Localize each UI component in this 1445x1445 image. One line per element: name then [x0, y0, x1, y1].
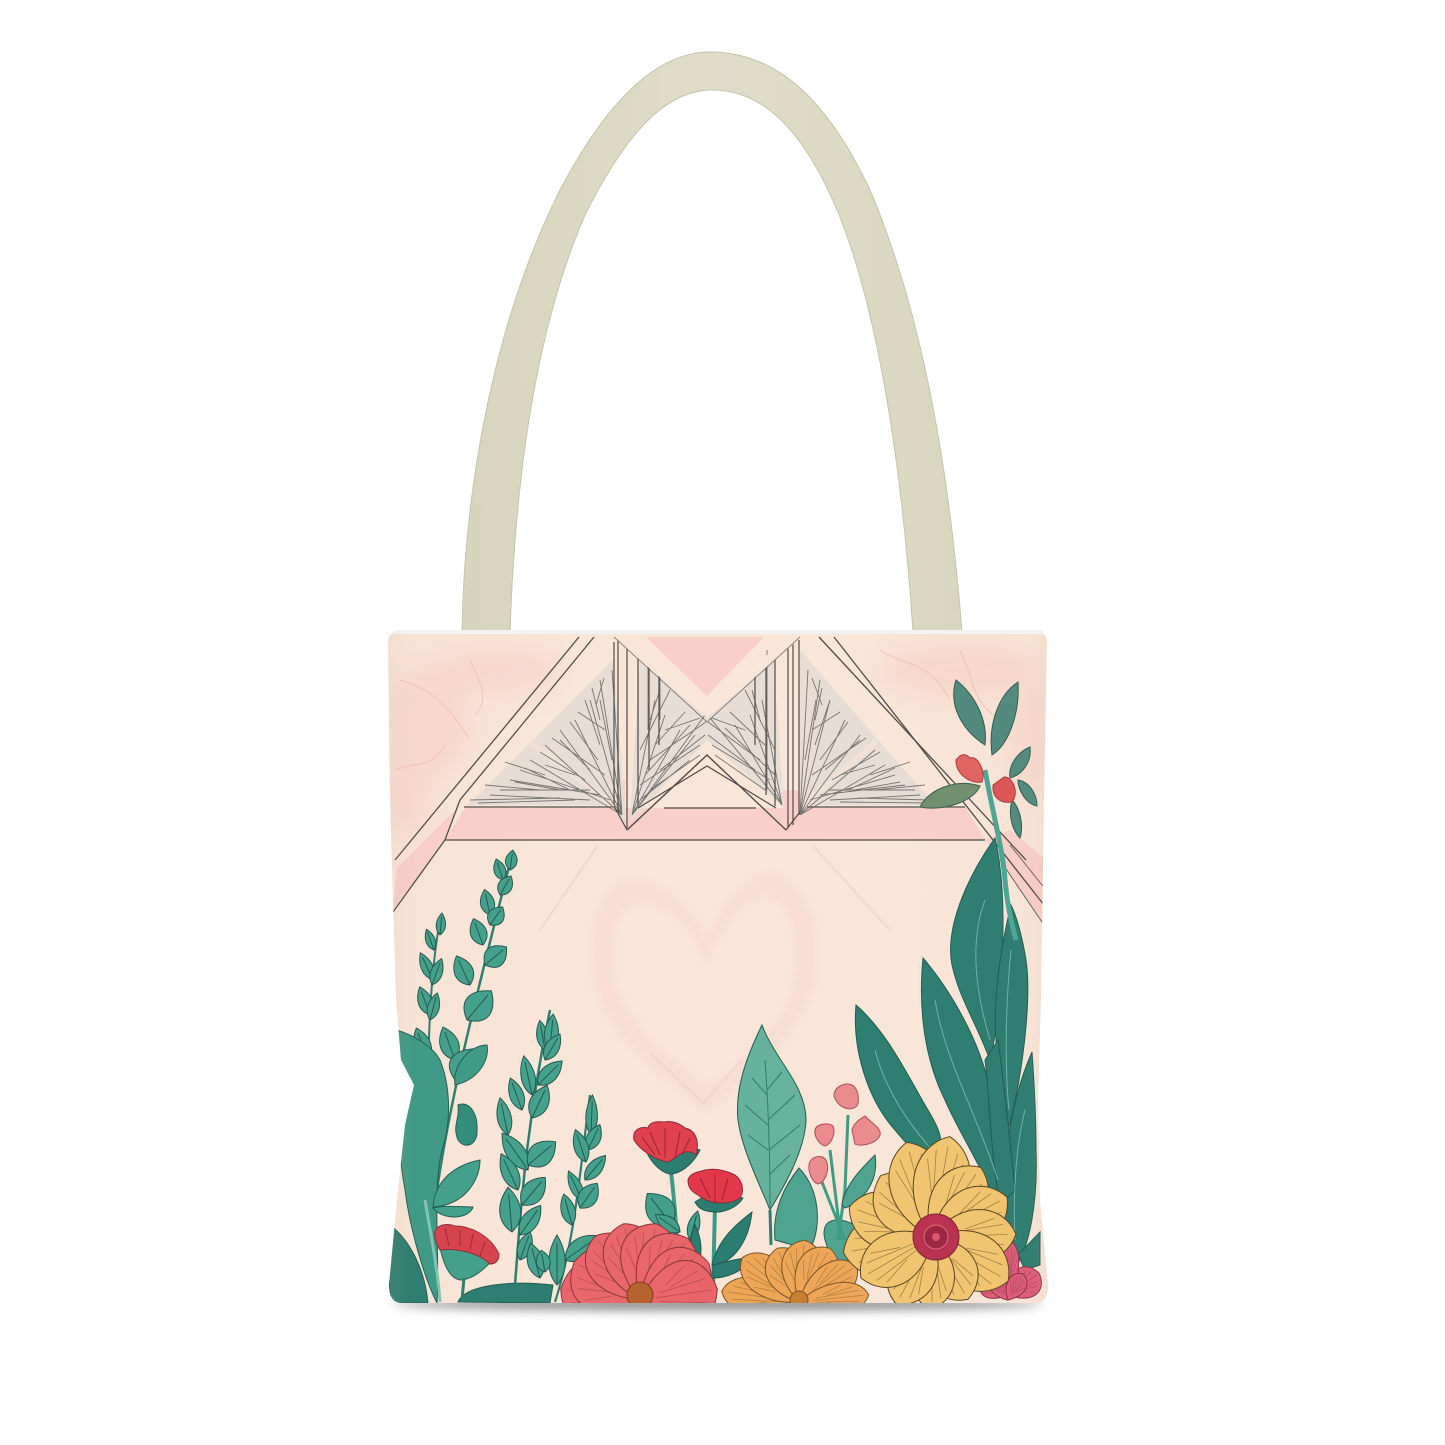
faint lower triangle lines	[540, 845, 890, 1103]
leaf: corner small	[1018, 1232, 1040, 1270]
fabric edge shading	[380, 630, 1060, 1310]
bag body	[380, 630, 1060, 1334]
red carnation centre	[633, 1121, 701, 1240]
plant: left sprig tall	[434, 849, 519, 1190]
bag handle	[462, 52, 962, 632]
leaf: tall centre blade	[951, 838, 1003, 1060]
watercolor heart	[598, 879, 812, 1102]
marble wash	[390, 640, 1052, 840]
plant: left sprig short	[414, 912, 446, 1049]
leaf: left blade	[855, 1005, 941, 1161]
red buds	[956, 755, 983, 782]
orange flower	[719, 1238, 870, 1320]
white lining at bag top	[392, 630, 1044, 640]
leaf: dark blob	[456, 1104, 477, 1145]
yellow flower	[838, 1132, 1022, 1315]
leaf: big blade	[397, 1030, 449, 1303]
flower centre	[913, 1214, 959, 1260]
top right flower sprig	[920, 680, 1037, 940]
leaf: upper right	[991, 682, 1018, 755]
small red flower left	[435, 1224, 499, 1300]
leaf: lower right	[824, 1220, 865, 1270]
plant: right sprig	[534, 1095, 611, 1302]
leaf: lower small	[775, 1168, 817, 1250]
tote bag illustration	[388, 52, 1048, 1318]
bag shadow	[393, 1297, 1043, 1311]
plant: tall right leaves	[855, 838, 1040, 1270]
leaves	[712, 1212, 752, 1265]
flower centre	[627, 1282, 653, 1308]
M zigzag	[614, 637, 800, 830]
coral flower	[556, 1218, 724, 1334]
pink band and triangles	[393, 637, 1046, 925]
red carnation right	[688, 1169, 752, 1290]
cream diagonal dividers	[530, 742, 615, 806]
marble veins	[395, 650, 1000, 770]
vertical stripes	[614, 640, 799, 828]
diagonal frame lines on right lower	[1000, 845, 1046, 925]
leaf: round	[433, 1160, 480, 1207]
leaf: middle long blade	[920, 956, 997, 1190]
leaf: upper left	[954, 680, 985, 745]
leaf: side small	[1010, 747, 1030, 778]
plant: big left foliage	[389, 1030, 553, 1303]
leaf: olive left	[920, 783, 980, 808]
leaf: lower right blade	[1003, 1052, 1036, 1270]
leaf: narrow right blade	[995, 905, 1028, 1130]
bloom	[634, 1121, 697, 1162]
plant: middle sprig	[496, 1010, 563, 1284]
leaf highlight veins	[875, 900, 1025, 1240]
pink buds	[809, 1084, 880, 1240]
central stem mass	[985, 1040, 1015, 1205]
pink flower right	[974, 1239, 1048, 1308]
roof frame lines	[393, 637, 1044, 912]
grey veins	[470, 670, 622, 815]
leaf: dark bottom	[389, 1225, 428, 1303]
big centre leaf	[737, 1025, 865, 1270]
vein-filled triangles	[468, 650, 935, 826]
